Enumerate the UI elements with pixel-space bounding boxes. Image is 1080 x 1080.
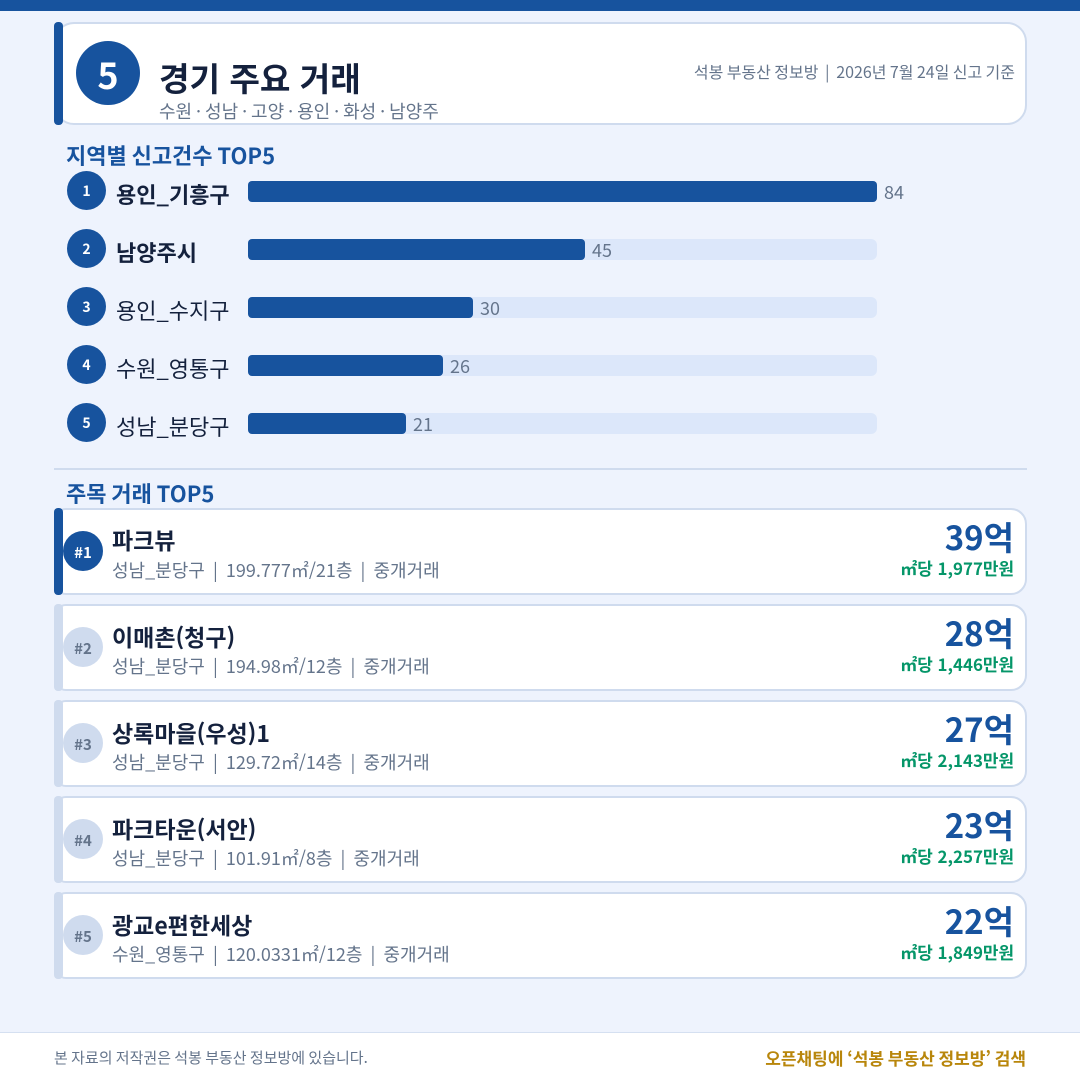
row 5 rank (67, 403, 106, 442)
top accent bar (0, 0, 1080, 11)
header panel (54, 22, 1027, 125)
deal card 3 (54, 700, 1027, 787)
row 3 bar (248, 297, 473, 318)
details: 성남_분당구 | 199.777㎡/21층 | 중개거래 (112, 557, 440, 583)
price per square meter: ㎡당 1,849만원 (900, 939, 1014, 964)
section heading: regional report counts: 지역별 신고건수 TOP5 (66, 139, 275, 171)
accent bar (54, 796, 63, 883)
row 2 value: 45 (592, 237, 612, 263)
details: 성남_분당구 | 194.98㎡/12층 | 중개거래 (112, 653, 430, 679)
row 2 bar track (248, 239, 877, 260)
issue number badge: 5 (97, 48, 119, 100)
price per square meter: ㎡당 1,446만원 (900, 651, 1014, 676)
deal card 1 (54, 508, 1027, 595)
name: 파크타운(서안) (112, 811, 256, 845)
name: 이매촌(청구) (112, 619, 235, 653)
rank badge: #5 (74, 926, 92, 947)
row 1 bar (248, 181, 877, 202)
row 4 label: 수원_영통구 (116, 352, 230, 384)
row 4 rank: 4 (82, 355, 91, 375)
accent bar (54, 508, 63, 595)
section heading: notable deals: 주목 거래 TOP5 (66, 477, 214, 509)
name: 광교e편한세상 (112, 907, 252, 941)
row 3 rank (67, 287, 106, 326)
copyright notice: 본 자료의 저작권은 석봉 부동산 정보방에 있습니다. (54, 1047, 368, 1068)
row 2 label: 남양주시 (116, 236, 197, 268)
rank badge: #2 (74, 638, 92, 659)
price per square meter: ㎡당 1,977만원 (900, 555, 1014, 580)
deal card 5 (54, 892, 1027, 979)
deal card 4 (54, 796, 1027, 883)
rank badge (63, 915, 103, 955)
row 3 rank: 3 (82, 297, 91, 317)
rank badge (63, 531, 103, 571)
card background (54, 604, 1027, 691)
footer (0, 1032, 1080, 1080)
row 3 label: 용인_수지구 (116, 294, 230, 326)
price: 27억 (945, 704, 1014, 752)
subtitle regions: 수원 · 성남 · 고양 · 용인 · 화성 · 남양주 (159, 98, 439, 124)
bar chart: regional top 5 (67, 171, 904, 442)
price per square meter: ㎡당 2,143만원 (900, 747, 1014, 772)
row 2 bar (248, 239, 585, 260)
source and date: 석봉 부동산 정보방 | 2026년 7월 24일 신고 기준 (694, 59, 1015, 83)
row 5 bar (248, 413, 406, 434)
row 3 bar track (248, 297, 877, 318)
row 2 rank (67, 229, 106, 268)
rank badge (63, 627, 103, 667)
row 4 rank (67, 345, 106, 384)
price: 22억 (945, 896, 1014, 944)
details: 성남_분당구 | 129.72㎡/14층 | 중개거래 (112, 749, 430, 775)
row 5 value: 21 (413, 411, 433, 437)
row 1 rank: 1 (82, 181, 91, 201)
card background (54, 796, 1027, 883)
rank badge: #4 (74, 830, 92, 851)
row 5 bar track (248, 413, 877, 434)
title: 경기 주요 거래 (159, 52, 361, 101)
card background (54, 508, 1027, 595)
header left accent bar (54, 22, 63, 125)
issue number badge (76, 41, 140, 105)
row 4 bar (248, 355, 443, 376)
rank badge (63, 723, 103, 763)
rank badge: #1 (74, 542, 92, 563)
open chat call to action: 오픈채팅에 ‘석봉 부동산 정보방’ 검색 (765, 1045, 1026, 1070)
row 1 label: 용인_기흥구 (116, 178, 230, 210)
row 1 value: 84 (884, 179, 904, 205)
deal card 2 (54, 604, 1027, 691)
rank badge (63, 819, 103, 859)
accent bar (54, 700, 63, 787)
name: 상록마을(우성)1 (112, 715, 270, 749)
card background (54, 700, 1027, 787)
price: 39억 (945, 512, 1014, 560)
row 1 rank (67, 171, 106, 210)
details: 수원_영통구 | 120.0331㎡/12층 | 중개거래 (112, 941, 450, 967)
row 4 value: 26 (450, 353, 470, 379)
name: 파크뷰 (112, 522, 175, 556)
price: 23억 (945, 800, 1014, 848)
price: 28억 (945, 608, 1014, 656)
accent bar (54, 604, 63, 691)
rank badge: #3 (74, 734, 92, 755)
details: 성남_분당구 | 101.91㎡/8층 | 중개거래 (112, 845, 420, 871)
row 3 value: 30 (480, 295, 500, 321)
price per square meter: ㎡당 2,257만원 (900, 843, 1014, 868)
card background (54, 892, 1027, 979)
row 2 rank: 2 (82, 239, 91, 259)
row 5 rank: 5 (82, 413, 91, 433)
row 4 bar track (248, 355, 877, 376)
header card background (54, 22, 1027, 125)
row 5 label: 성남_분당구 (116, 410, 230, 442)
row 1 bar track (248, 181, 877, 202)
accent bar (54, 892, 63, 979)
